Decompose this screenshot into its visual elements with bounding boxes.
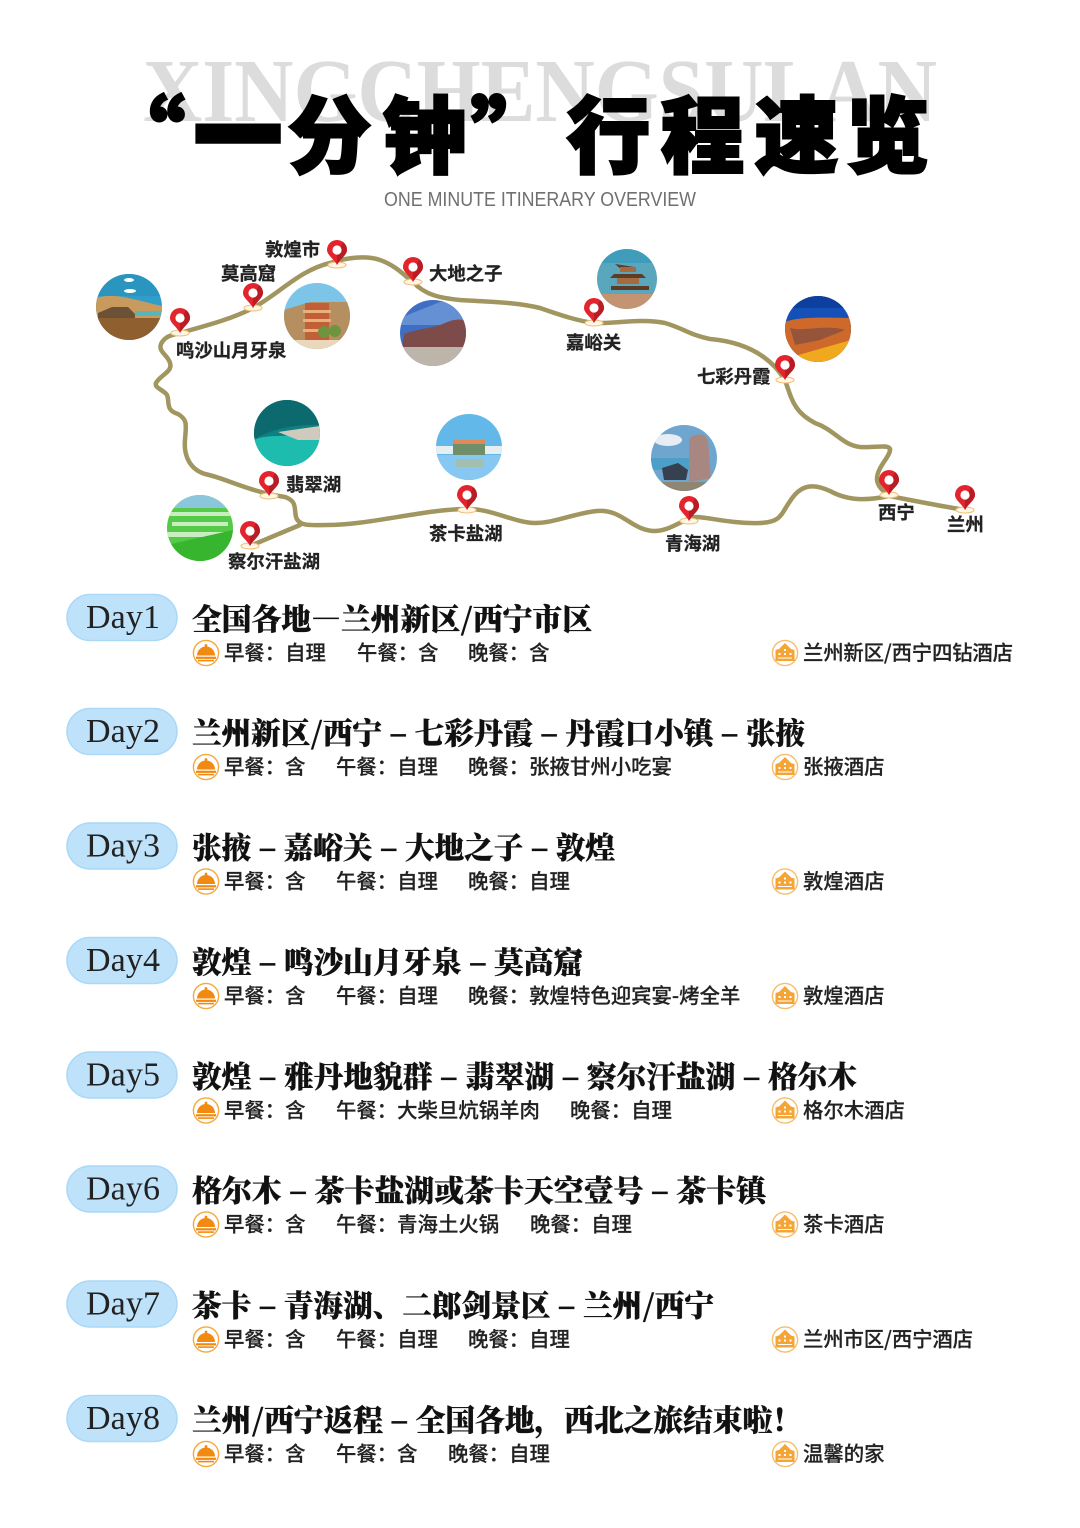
meals: 晚餐：张掖甘州小吃宴 — [468, 750, 672, 780]
meals: 早餐：含 — [224, 750, 306, 780]
pin: Mogao — [243, 283, 263, 311]
pin: Lanzhou — [955, 485, 975, 513]
icon: hotel — [772, 983, 798, 1009]
day label: Day2 — [86, 713, 160, 750]
title: 钟 — [383, 70, 466, 190]
hotel: 敦煌酒店 — [803, 979, 885, 1009]
pin: Chaka — [457, 485, 477, 513]
labels: 西宁 — [878, 502, 915, 523]
route heading: 茶卡 – 青海湖、二郎剑景区 – 兰州/西宁 — [192, 1282, 714, 1326]
pill — [67, 1281, 177, 1327]
route line — [156, 257, 965, 546]
pill — [67, 1396, 177, 1442]
icon: meal — [193, 640, 219, 666]
icon: meal — [193, 1441, 219, 1467]
hotel: 张掖酒店 — [803, 750, 885, 780]
meals — [224, 1208, 632, 1238]
route heading: 敦煌 – 雅丹地貌群 – 翡翠湖 – 察尔汗盐湖 – 格尔木 — [192, 1052, 857, 1096]
labels: 茶卡盐湖 — [429, 523, 503, 544]
labels: 兰州 — [947, 514, 984, 535]
meals: 早餐：含 — [224, 1094, 306, 1124]
day label: Day1 — [86, 599, 160, 636]
labels: 鸣沙山月牙泉 — [176, 340, 286, 361]
route heading: 敦煌 – 鸣沙山月牙泉 – 莫高窟 — [192, 938, 583, 982]
labels — [176, 239, 984, 572]
route heading: 兰州新区/西宁 – 七彩丹霞 – 丹霞口小镇 – 张掖 — [192, 709, 805, 753]
labels: 大地之子 — [429, 263, 503, 284]
meals: 午餐：自理 — [336, 979, 438, 1009]
icon: meal — [193, 754, 219, 780]
photo: Chaka salt lake — [436, 414, 502, 480]
labels: 嘉峪关 — [566, 332, 621, 353]
day label: Day8 — [86, 1400, 160, 1437]
icon: hotel — [772, 1441, 798, 1467]
watermark: pinyin title: XINGCHENGSULAN — [143, 42, 937, 141]
meals: 晚餐：自理 — [570, 1094, 672, 1124]
hotel: 敦煌酒店 — [803, 864, 885, 894]
hotel: 兰州新区/西宁四钻酒店 — [803, 636, 1013, 666]
labels: 七彩丹霞 — [697, 366, 771, 387]
meals — [224, 1437, 550, 1467]
day 2 row — [67, 708, 885, 780]
icon: meal — [193, 1098, 219, 1123]
title: “ — [102, 70, 185, 190]
meals: 晚餐：自理 — [530, 1208, 632, 1238]
meals: 早餐：自理 — [224, 636, 326, 666]
meals: 早餐：含 — [224, 1208, 306, 1238]
hotel: 兰州市区/西宁酒店 — [803, 1322, 973, 1352]
pin: Jiayu — [584, 298, 604, 326]
meals: 午餐：自理 — [336, 750, 438, 780]
meals: 早餐：含 — [224, 1322, 306, 1352]
icon: meal — [193, 1327, 219, 1352]
photo: Mingsha dunes — [96, 274, 162, 340]
pin: Earth — [403, 257, 423, 285]
meals — [224, 636, 550, 666]
pin: Mingsha — [170, 308, 190, 336]
title: ” — [471, 70, 554, 190]
icon: hotel — [772, 869, 798, 894]
photo: Qinghai lake stele — [651, 425, 717, 491]
labels: 青海湖 — [665, 533, 720, 554]
meals: 午餐：自理 — [336, 864, 438, 894]
day 8 row — [67, 1396, 885, 1467]
meals — [224, 750, 672, 780]
meals: 午餐：含 — [357, 636, 439, 666]
pin: Xining — [879, 470, 899, 498]
meals: 午餐：含 — [336, 1437, 418, 1467]
route heading: 格尔木 – 茶卡盐湖或茶卡天空壹号 – 茶卡镇 — [192, 1166, 771, 1210]
title — [102, 70, 929, 190]
pin: Danxia — [775, 355, 795, 383]
icon: meal — [193, 983, 219, 1009]
meals: 晚餐：含 — [468, 636, 550, 666]
hotel: 温馨的家 — [803, 1437, 885, 1467]
title: 行 — [567, 70, 650, 190]
icon: hotel — [772, 754, 798, 780]
meals: 晚餐：自理 — [448, 1437, 550, 1467]
meals — [224, 864, 570, 894]
labels: 敦煌市 — [265, 239, 320, 260]
meals: 晚餐：自理 — [468, 1322, 570, 1352]
photo: Mother Earth sculpture — [400, 300, 466, 366]
meals: 早餐：含 — [224, 864, 306, 894]
title: 速 — [755, 70, 838, 190]
photo: Qarhan salt lake — [167, 495, 233, 561]
day 4 row — [67, 938, 885, 1009]
meals: 早餐：含 — [224, 1437, 306, 1467]
meals: 午餐：自理 — [336, 1322, 438, 1352]
meals: 午餐：青海土火锅 — [336, 1208, 499, 1238]
pill — [67, 823, 177, 869]
route heading: 全国各地—兰州新区/西宁市区 — [192, 595, 592, 639]
labels: 察尔汗盐湖 — [228, 551, 320, 572]
day label: Day3 — [86, 828, 160, 864]
title: 览 — [846, 70, 929, 190]
title: 一 — [196, 70, 280, 190]
meals — [224, 979, 740, 1009]
pin: Qarhan — [240, 521, 260, 549]
day label: Day5 — [86, 1056, 160, 1094]
route map — [96, 239, 984, 572]
route heading: 兰州/西宁返程 – 全国各地，西北之旅结束啦！ — [192, 1396, 802, 1440]
meals: 早餐：含 — [224, 979, 306, 1009]
subtitle: ONE MINUTE ITINERARY OVERVIEW — [384, 189, 696, 211]
day label: Day7 — [86, 1286, 160, 1322]
day 3 row — [67, 823, 885, 894]
pin: Dunhuang — [327, 240, 347, 268]
icon: meal — [193, 1212, 219, 1237]
icon: hotel — [772, 1098, 798, 1123]
day 5 row — [67, 1052, 905, 1124]
hotel: 格尔木酒店 — [803, 1094, 905, 1124]
photo: Jiayu pass — [597, 249, 657, 309]
pill — [67, 1052, 177, 1098]
day 7 row — [67, 1281, 973, 1352]
route heading: 张掖 – 嘉峪关 – 大地之子 – 敦煌 — [192, 824, 615, 868]
day label: Day4 — [86, 942, 160, 979]
meals: 午餐：大柴旦炕锅羊肉 — [336, 1094, 540, 1124]
day label: Day6 — [86, 1170, 160, 1208]
icon: hotel — [772, 640, 798, 666]
meals: 晚餐：自理 — [468, 864, 570, 894]
meals: 晚餐：敦煌特色迎宾宴-烤全羊 — [468, 979, 740, 1009]
photo: Danxia landform — [785, 296, 851, 362]
day 6 row — [67, 1166, 885, 1238]
meals — [224, 1322, 570, 1352]
icon: hotel — [772, 1327, 798, 1352]
pill — [67, 1166, 177, 1212]
labels: 翡翠湖 — [286, 474, 341, 495]
title: 分 — [288, 70, 371, 190]
pill — [67, 708, 177, 754]
meals — [224, 1094, 672, 1124]
pill — [67, 938, 177, 984]
pill — [67, 594, 177, 640]
day 1 row — [67, 594, 1013, 666]
icon: meal — [193, 869, 219, 894]
labels: 莫高窟 — [221, 263, 276, 284]
hotel: 茶卡酒店 — [803, 1208, 885, 1238]
pin: Feicui — [259, 471, 279, 499]
icon: hotel — [772, 1212, 798, 1237]
title: 程 — [661, 70, 744, 190]
pin: Qinghai lake — [679, 496, 699, 524]
photo: Mogao caves — [284, 283, 350, 349]
photo: Feicui lake — [254, 400, 320, 466]
